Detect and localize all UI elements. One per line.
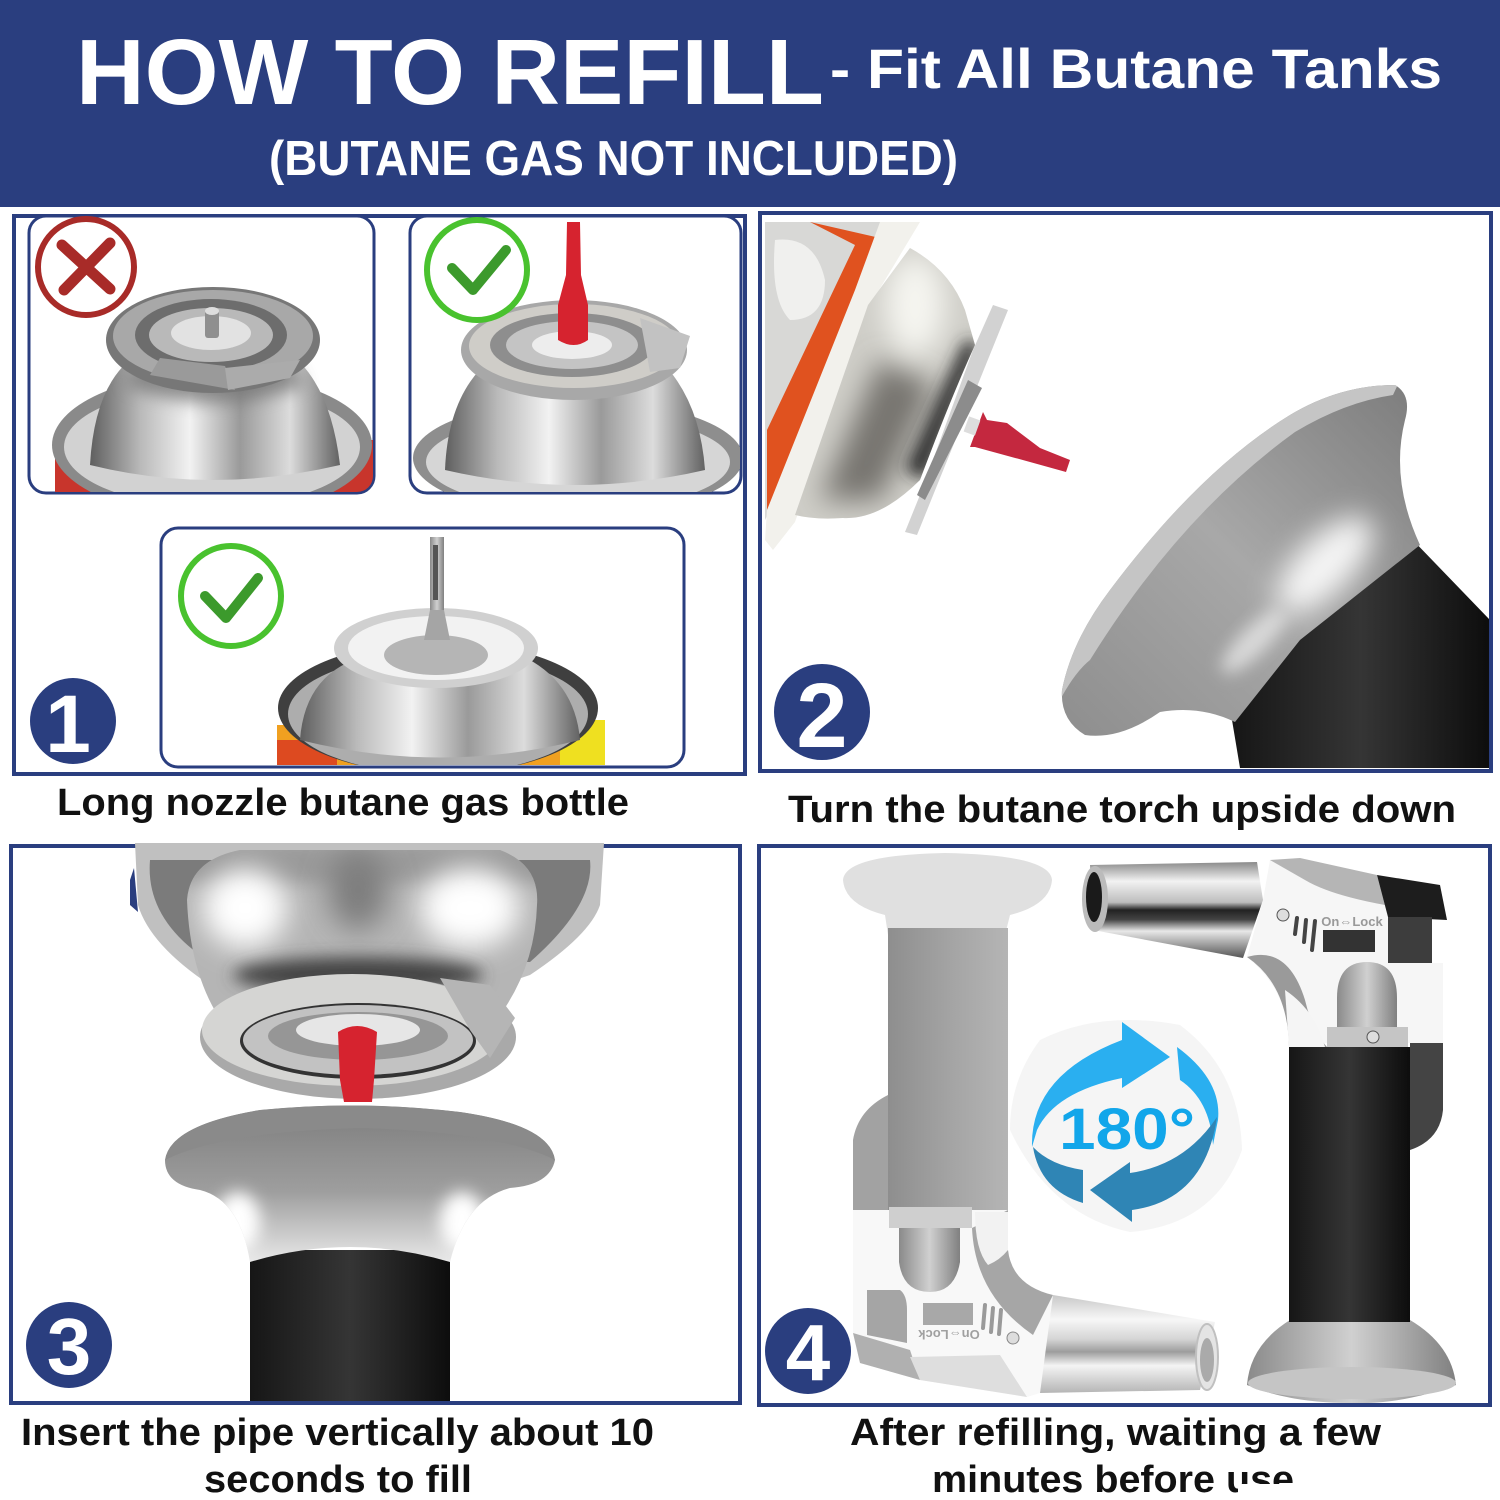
badge: number 4: 4 <box>786 1308 831 1397</box>
photo: torch base upright <box>165 1105 555 1405</box>
caption: step 3: seconds to fill <box>204 1459 472 1500</box>
caption: step 1: Long nozzle butane gas bottle <box>57 782 629 824</box>
panel: step 3 <box>11 843 740 1405</box>
subtitle: fit all butane tanks: - Fit All Butane Tanks <box>830 37 1442 100</box>
badge: number 1: 1 <box>45 679 91 770</box>
badge: number 3: 3 <box>47 1302 91 1391</box>
badge: number 1 <box>30 678 116 770</box>
icon: green check <box>427 220 527 320</box>
caption: step 3 <box>21 1412 654 1500</box>
panel: step 4 <box>759 846 1490 1405</box>
caption: step 4: After refilling, waiting a few <box>850 1412 1381 1454</box>
badge: number 4 <box>765 1308 851 1397</box>
caption: step 4: minutes before use <box>932 1459 1294 1500</box>
header banner <box>0 0 1500 207</box>
icon: green check <box>181 546 281 646</box>
photo: torch base upside down <box>1050 380 1490 768</box>
photo: torch upright <box>1082 858 1456 1403</box>
photo: long metal nozzle can <box>161 528 684 774</box>
icon: 180 degree rotation <box>1010 1020 1242 1232</box>
badge: number 3 <box>26 1302 112 1391</box>
photo: torch ghosted upside down: On⇔Lock <box>918 1327 980 1342</box>
title: HOW TO REFILL <box>76 20 824 124</box>
badge: number 2: 2 <box>796 665 848 767</box>
icon: red cross <box>38 219 134 315</box>
caption: step 3: Insert the pipe vertically about 10 <box>21 1412 654 1454</box>
badge: number 2 <box>774 664 870 767</box>
note: butane gas not included: (BUTANE GAS NOT INCLUDED) <box>269 132 958 186</box>
panel: step 1 <box>14 216 745 774</box>
icon: 180 degree rotation: 180° <box>1059 1097 1195 1162</box>
photo: inverted butane can <box>135 843 604 1102</box>
caption: step 2: Turn the butane torch upside down <box>788 789 1456 831</box>
photo: red pipe in bowl can <box>410 216 743 516</box>
photo: tilted butane can <box>765 222 1070 550</box>
photo: wrong short nozzle can <box>29 216 375 517</box>
photo: torch ghosted upside down <box>843 853 1218 1397</box>
caption: step 4 <box>850 1412 1381 1500</box>
photo: torch upright: On⇔Lock <box>1321 914 1383 929</box>
panel: step 2 <box>760 213 1491 771</box>
